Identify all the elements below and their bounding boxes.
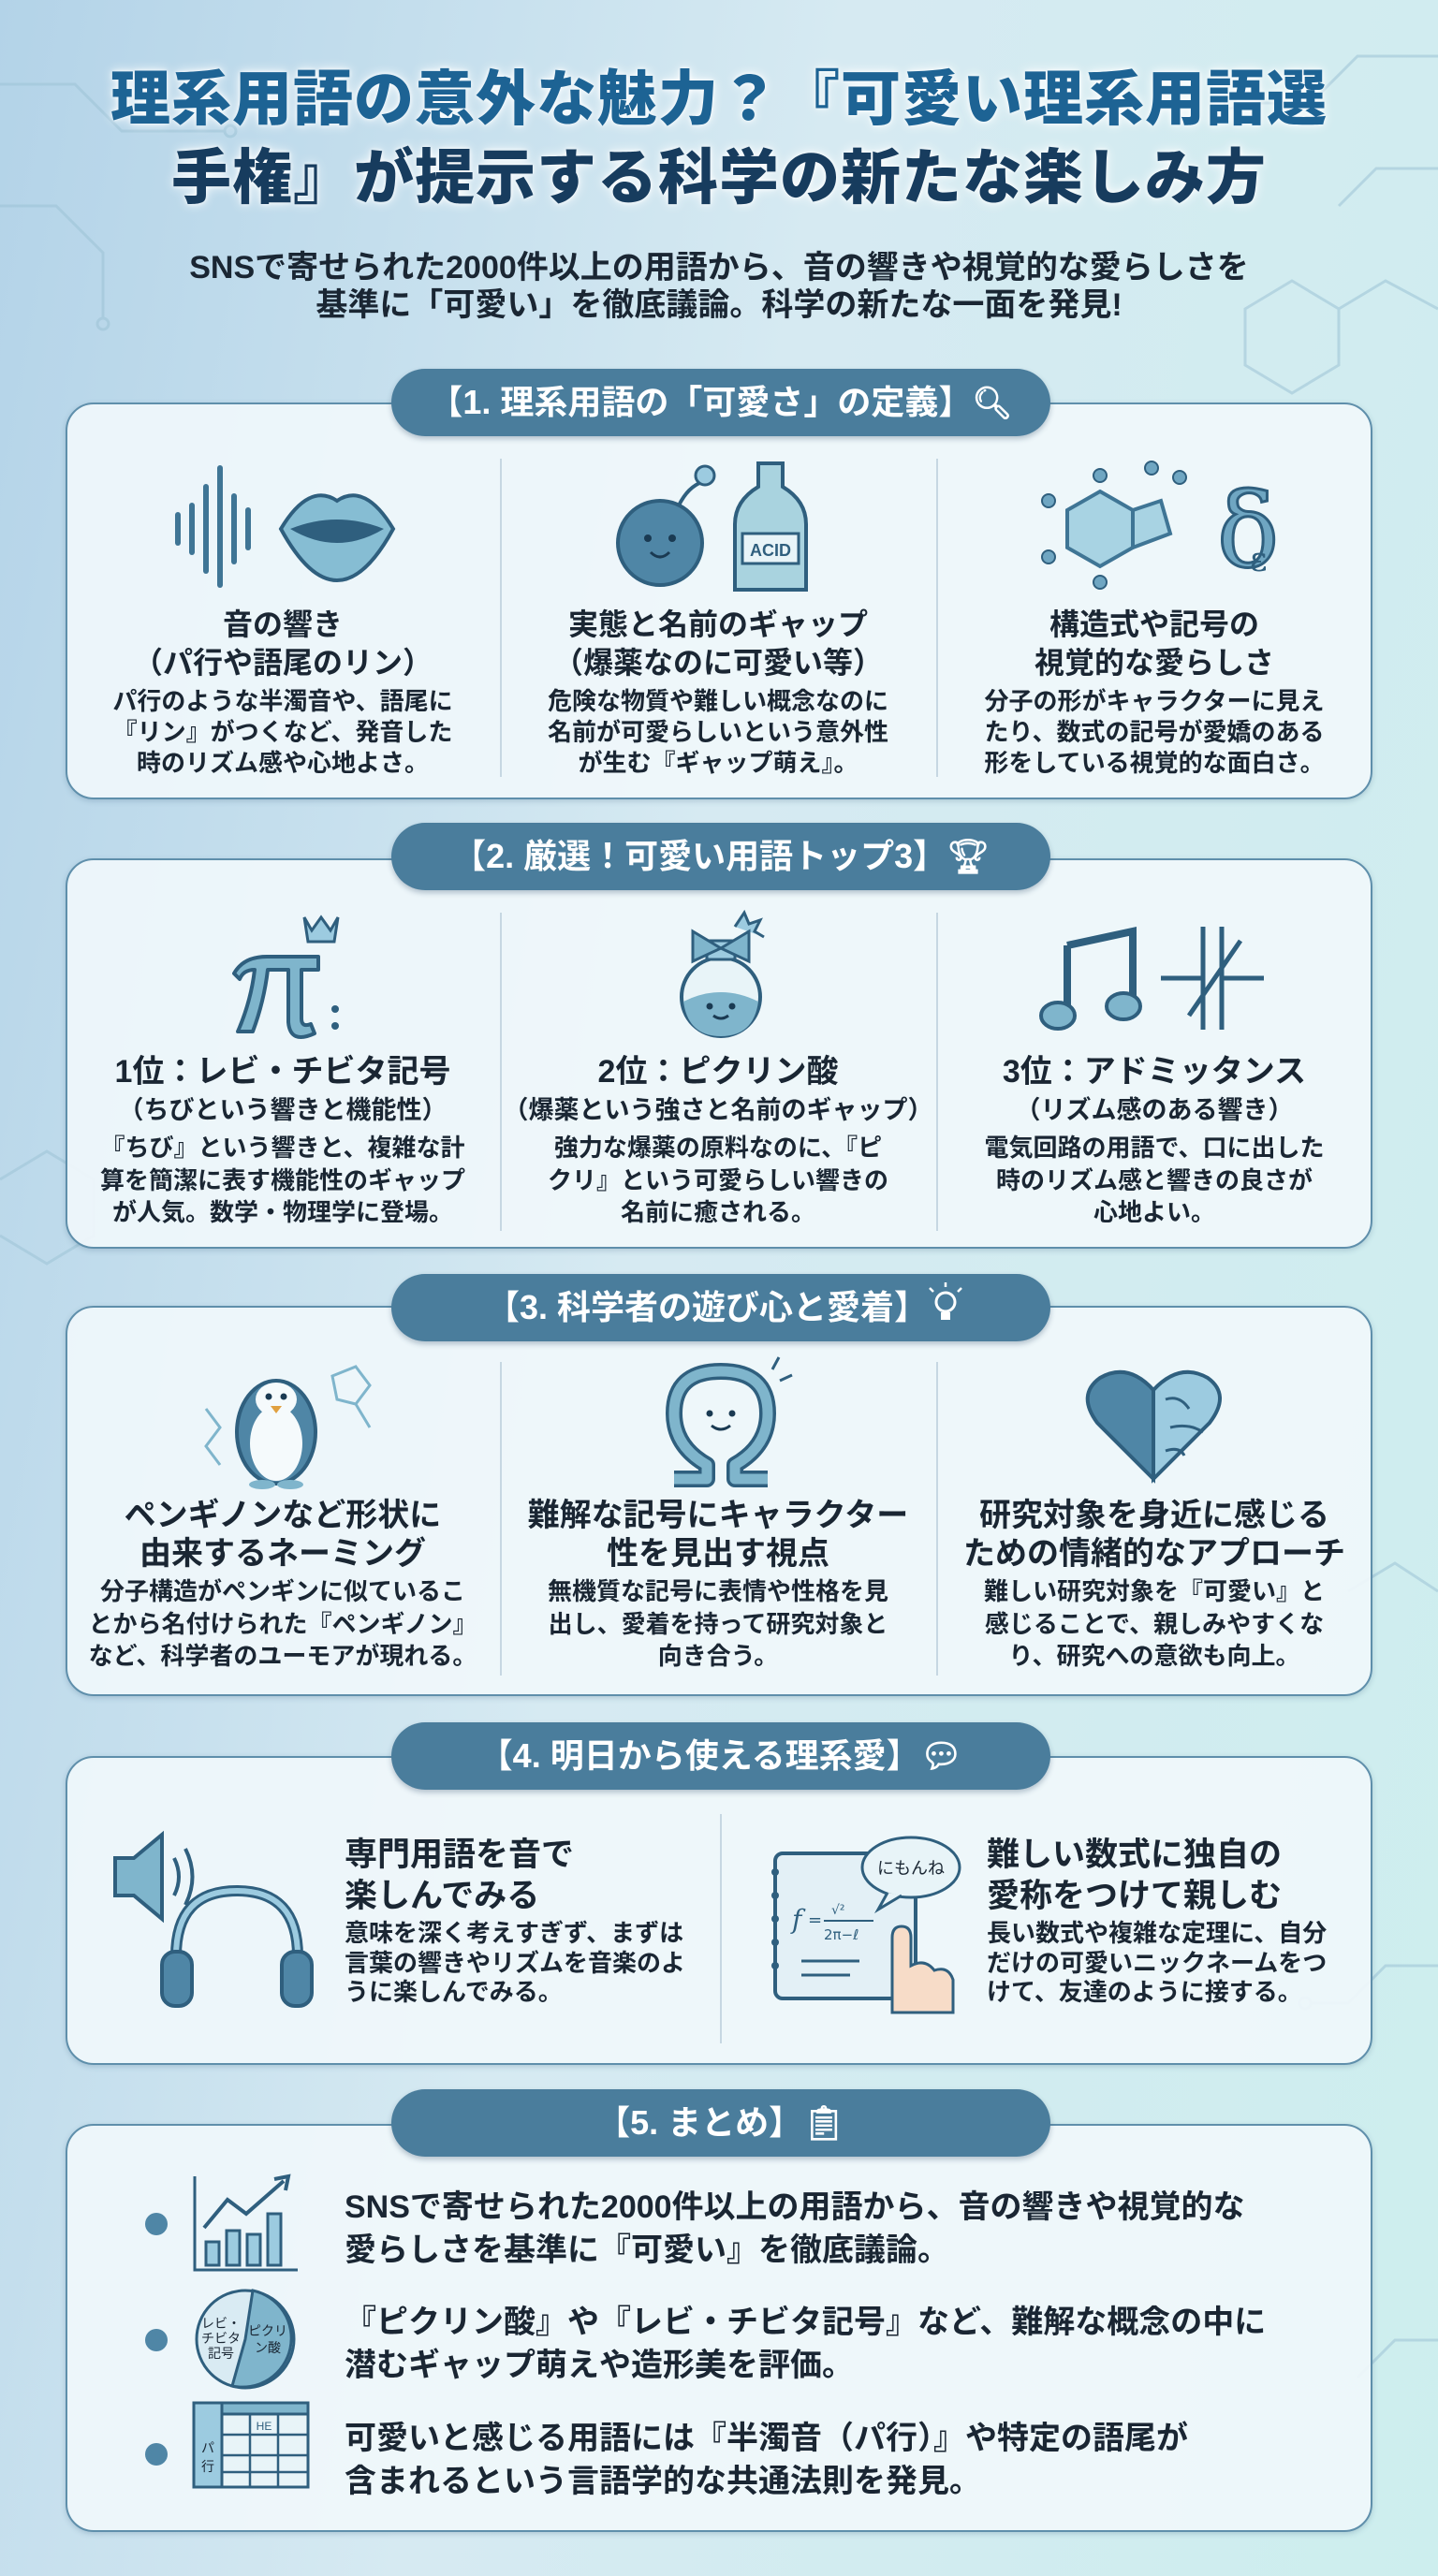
text block: gap xyxy=(548,607,888,777)
icon: molecule and delta: δ xyxy=(1217,471,1279,591)
summary text 2 xyxy=(345,2305,1266,2383)
summary text 3 xyxy=(345,2421,1188,2499)
heading pill: section 5: 【5. まとめ】📋︎ xyxy=(596,2103,845,2142)
icon: molecule and delta: ε xyxy=(1250,541,1268,579)
text block: emotional: 難しい研究対象を『可愛い』と xyxy=(984,1577,1325,1605)
text block: rank 1 xyxy=(100,1054,465,1226)
icon: notebook formula with hand: 2π−ℓ xyxy=(824,1926,858,1943)
icon: notebook formula with hand xyxy=(771,1837,961,2014)
icon: table grid xyxy=(193,2402,309,2488)
text block: rank 3: 心地よい。 xyxy=(1093,1198,1215,1226)
text block: sound: （パ行や語尾のリン） xyxy=(133,646,433,680)
text block: emotional xyxy=(963,1498,1345,1670)
text block: characters: 出し、愛着を持って研究対象と xyxy=(549,1610,888,1638)
text block: characters: 難解な記号にキャラクター xyxy=(528,1498,908,1533)
panel: section 4 tips xyxy=(66,1756,1372,2065)
icon: table grid: 行 xyxy=(201,2459,214,2474)
heading pill: section 2: 【2. 厳選！可愛い用語トップ3】🏆︎ xyxy=(452,837,990,875)
text block: rank 3: 3位：アドミッタンス xyxy=(1003,1054,1306,1090)
text block: rank 3 xyxy=(985,1054,1324,1226)
text block: enjoy sounds: うに楽しんでみる。 xyxy=(345,1978,563,2006)
icon: music note and capacitor xyxy=(1039,927,1264,1031)
icon: pie chart xyxy=(195,2289,296,2389)
text block: penguinone: ペンギノンなど形状に xyxy=(125,1498,441,1533)
text block: nicknames: 愛称をつけて親しむ xyxy=(987,1878,1282,1914)
text block: sound xyxy=(112,607,453,777)
text block: rank 1: 『ちび』という響きと、複雑な計 xyxy=(101,1134,464,1162)
icon: notebook formula with hand: = xyxy=(808,1910,822,1930)
heading pill: section 3: 【3. 科学者の遊び心と愛着】 xyxy=(486,1288,928,1326)
text block: rank 2: 強力な爆薬の原料なのに、『ピ xyxy=(554,1134,882,1162)
text block: characters: 無機質な記号に表情や性格を見 xyxy=(548,1577,888,1605)
summary text 1 xyxy=(345,2189,1245,2268)
icon: pi with crown xyxy=(232,915,339,1039)
text block: gap: 名前が可愛らしいという意外性 xyxy=(548,718,888,746)
summary item 2 xyxy=(145,2289,1266,2389)
icon: sound wave and lips xyxy=(175,465,395,588)
text block: gap: が生む『ギャップ萌え』。 xyxy=(578,749,858,777)
icon: bomb and acid bottle xyxy=(616,461,808,592)
title: 理系用語の意外な魅力？『可愛い理系用語選 xyxy=(110,66,1328,133)
text block: visual: たり、数式の記号が愛嬌のある xyxy=(985,718,1324,746)
text block: penguinone: 分子構造がペンギンに似ているこ xyxy=(100,1577,465,1605)
summary text 3: 含まれるという言語学的な共通法則を発見。 xyxy=(345,2464,981,2499)
text block: penguinone: とから名付けられた『ペンギノン』 xyxy=(89,1610,477,1638)
text block: gap: （爆薬なのに可愛い等） xyxy=(553,646,883,680)
subtitle: 基準に「可愛い」を徹底議論。科学の新たな一面を発見! xyxy=(315,287,1123,323)
icon: pie chart: 記号 xyxy=(208,2346,234,2361)
text block: rank 2: クリ』という可愛らしい響きの xyxy=(548,1166,888,1194)
icon: speaker and headphones xyxy=(113,1831,314,2008)
text block: visual xyxy=(984,607,1325,777)
icon: heart brain xyxy=(1086,1370,1222,1484)
text block: enjoy sounds: 専門用語を音で xyxy=(345,1837,574,1873)
text block: sound: 音の響き xyxy=(223,607,343,641)
text block: visual: 形をしている視覚的な面白さ。 xyxy=(984,749,1325,777)
icon: table grid: パ xyxy=(201,2440,214,2455)
summary text 2: 潜むギャップ萌えや造形美を評価。 xyxy=(345,2348,854,2383)
heading pill: section 3 xyxy=(391,1274,1050,1341)
summary text 3: 可愛いと感じる用語には『半濁音（パ行）』や特定の語尾が xyxy=(345,2421,1188,2456)
icon: pie chart: ン酸 xyxy=(255,2340,281,2355)
text block: emotional: り、研究への意欲も向上。 xyxy=(1009,1642,1299,1670)
heading pill: section 5 xyxy=(391,2089,1050,2157)
text block: rank 1: 1位：レビ・チビタ記号 xyxy=(115,1054,450,1090)
text block: sound: 時のリズム感や心地よさ。 xyxy=(137,749,429,777)
panel: section 3 playfulness xyxy=(66,1306,1372,1696)
text block: penguinone xyxy=(89,1498,477,1670)
text block: gap: 実態と名前のギャップ xyxy=(568,607,868,641)
text block: characters: 性を見出す視点 xyxy=(607,1536,829,1572)
text block: sound: パ行のような半濁音や、語尾に xyxy=(112,687,453,715)
heading pill: section 4: 【4. 明日から使える理系愛】💬︎ xyxy=(479,1736,962,1775)
text block: nicknames: だけの可愛いニックネームをつ xyxy=(987,1949,1327,1977)
icon: rising bar chart xyxy=(193,2174,298,2271)
icon: flask bomb with ribbon xyxy=(680,910,765,1038)
text block: rank 3: （リズム感のある響き） xyxy=(1015,1096,1294,1124)
summary item 3 xyxy=(145,2402,1188,2499)
text block: enjoy sounds: 意味を深く考えすぎず、まずは xyxy=(345,1919,683,1947)
heading pill: section 4 xyxy=(391,1722,1050,1790)
heading pill: section 1 xyxy=(391,369,1050,436)
text block: enjoy sounds xyxy=(345,1837,685,2006)
text block: penguinone: 由来するネーミング xyxy=(139,1536,426,1572)
text block: enjoy sounds: 楽しんでみる xyxy=(345,1878,539,1914)
summary text 2: 『ピクリン酸』や『レビ・チビタ記号』など、難解な概念の中に xyxy=(345,2305,1266,2340)
icon: omega with face xyxy=(666,1356,793,1487)
text block: rank 3: 電気回路の用語で、口に出した xyxy=(985,1134,1324,1162)
text block: emotional: 感じることで、親しみやすくな xyxy=(985,1610,1324,1638)
title: 手権』が提示する科学の新たな楽しみ方 xyxy=(171,144,1267,212)
text block: nicknames: 難しい数式に独自の xyxy=(987,1837,1282,1873)
subtitle: SNSで寄せられた2000件以上の用語から、音の響きや視覚的な愛らしさを xyxy=(189,250,1249,285)
text block: rank 1: 算を簡潔に表す機能性のギャップ xyxy=(100,1166,465,1194)
summary text 1: SNSで寄せられた2000件以上の用語から、音の響きや視覚的な xyxy=(345,2189,1245,2225)
icon: bomb and acid bottle: ACID xyxy=(750,541,791,560)
text block: rank 2: 名前に癒される。 xyxy=(621,1198,815,1226)
text block: rank 1: （ちびという響きと機能性） xyxy=(118,1096,448,1124)
icon: notebook formula with hand: f xyxy=(790,1904,806,1935)
heading pill: section 2 xyxy=(391,823,1050,890)
text block: enjoy sounds: 言葉の響きやリズムを音楽のよ xyxy=(345,1949,685,1977)
panel: section 1 definition xyxy=(66,402,1372,799)
text block: visual: 構造式や記号の xyxy=(1049,607,1259,641)
text block: rank 2: （爆薬という強さと名前のギャップ） xyxy=(504,1096,932,1124)
text block: rank 2: 2位：ピクリン酸 xyxy=(598,1054,838,1090)
summary item 1 xyxy=(145,2174,1245,2271)
text block: emotional: 研究対象を身近に感じる xyxy=(979,1498,1329,1533)
text block: gap: 危険な物質や難しい概念なのに xyxy=(548,687,888,715)
text block: nicknames: 長い数式や複雑な定理に、自分 xyxy=(987,1919,1327,1947)
panel: section 2 top 3 xyxy=(66,858,1372,1249)
icon: pie chart: チビタ xyxy=(201,2331,241,2346)
text block: rank 3: 時のリズム感と響きの良さが xyxy=(996,1166,1313,1194)
icon: notebook formula with hand: にもんね xyxy=(877,1859,945,1878)
text block: emotional: ための情緒的なアプローチ xyxy=(963,1536,1345,1572)
text block: visual: 分子の形がキャラクターに見え xyxy=(985,687,1324,715)
bullet 3 xyxy=(145,2443,168,2466)
text block: nicknames: けて、友達のように接する。 xyxy=(987,1978,1302,2006)
text block: penguinone: など、科学者のユーモアが現れる。 xyxy=(89,1642,477,1670)
text block: rank 2 xyxy=(504,1054,932,1226)
bullet 2 xyxy=(145,2329,168,2351)
title xyxy=(107,64,1329,212)
panel: section 5 summary xyxy=(66,2124,1372,2532)
text block: characters: 向き合う。 xyxy=(658,1642,778,1670)
icon: table grid: HE xyxy=(257,2420,271,2433)
summary text 1: 愛らしさを基準に『可愛い』を徹底議論。 xyxy=(345,2232,949,2268)
heading pill: section 1: 【1. 理系用語の「可愛さ」の定義】🔍︎ xyxy=(429,383,1013,421)
bullet 1 xyxy=(145,2213,168,2235)
text block: sound: 『リン』がつくなど、発音した xyxy=(113,718,452,746)
icon: penguin with molecule xyxy=(204,1365,372,1489)
icon: molecule and delta xyxy=(1041,461,1279,591)
text block: rank 1: が人気。数学・物理学に登場。 xyxy=(112,1198,453,1226)
text block: visual: 視覚的な愛らしさ xyxy=(1034,646,1274,680)
text block: characters xyxy=(528,1498,908,1670)
subtitle xyxy=(189,250,1249,323)
icon: pie chart: レビ・ xyxy=(201,2316,241,2331)
text block: nicknames xyxy=(987,1837,1327,2006)
icon: pie chart: ピクリ xyxy=(248,2323,287,2338)
icon: notebook formula with hand: √² xyxy=(831,1903,845,1918)
